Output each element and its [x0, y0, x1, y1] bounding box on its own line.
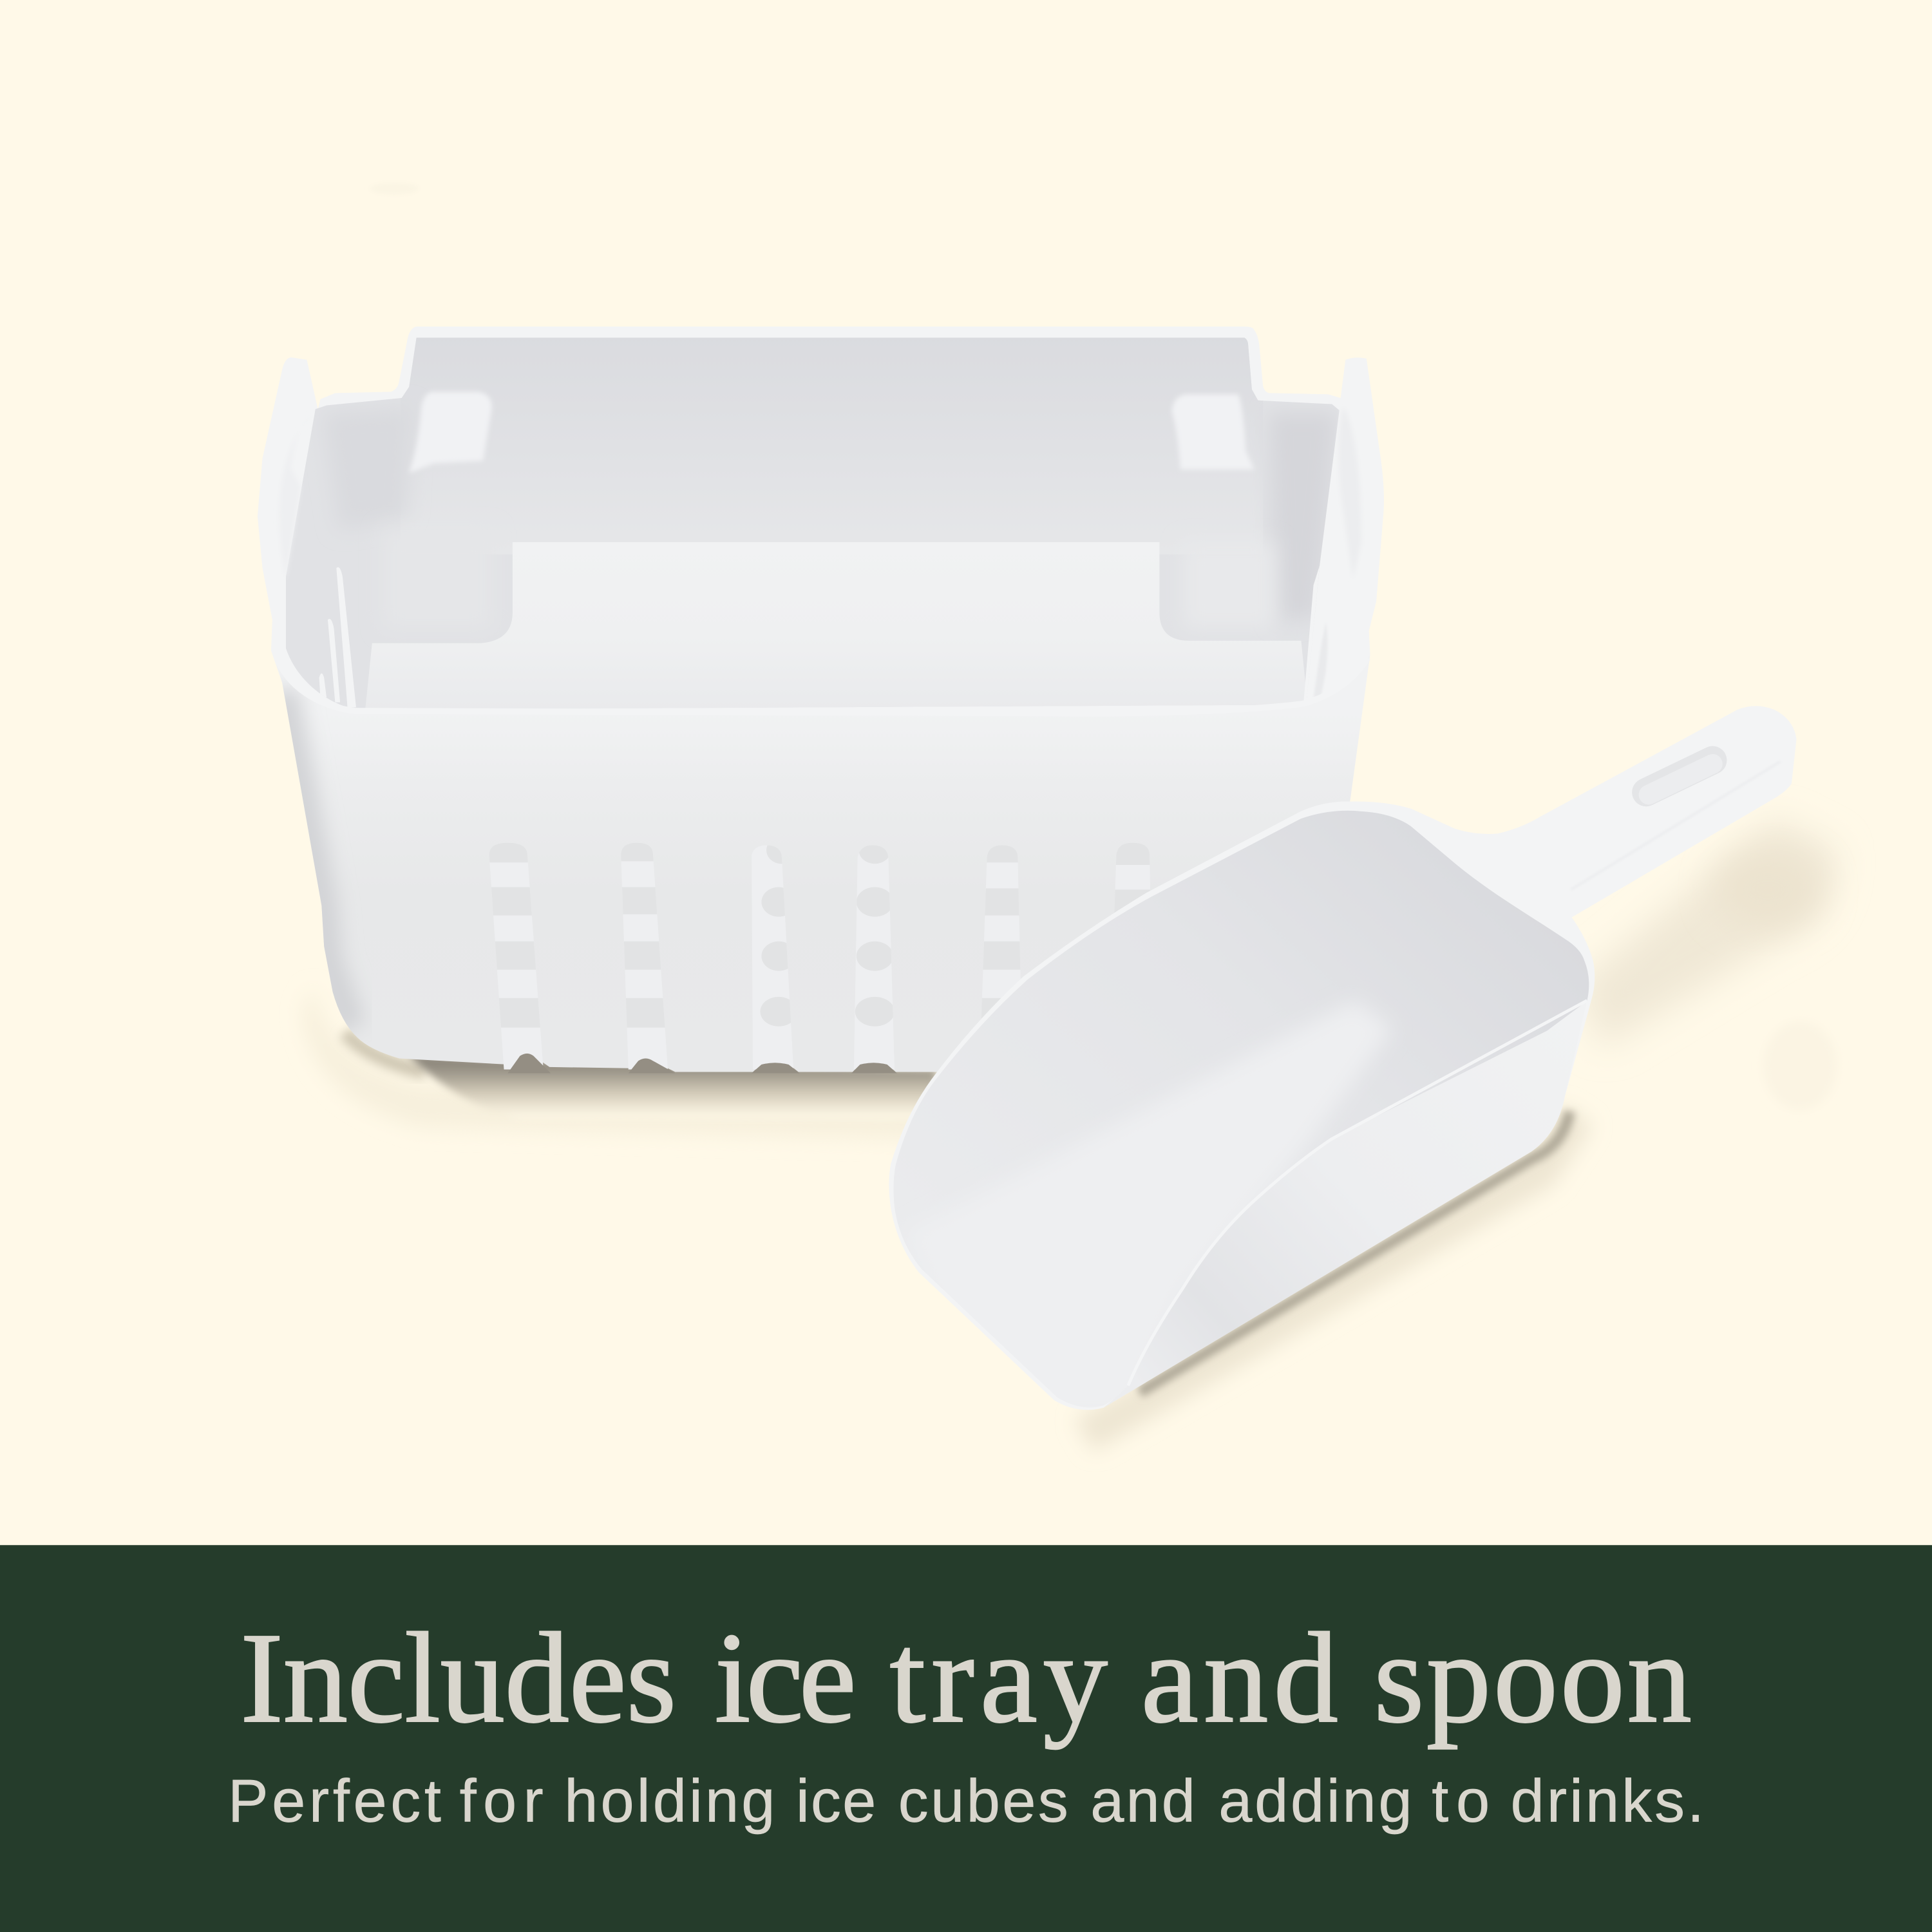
faint smudges on background [370, 182, 1837, 1110]
band background [0, 1545, 1932, 1932]
heading: Includes [240, 1607, 676, 1750]
stepped floor [365, 542, 1309, 715]
left pillar body light [382, 530, 493, 629]
drain slot 6 [1104, 838, 1159, 1072]
caption band [0, 1545, 1932, 1932]
drain slot 1 [504, 1056, 544, 1070]
right pillar body light [1251, 558, 1272, 611]
subheading: ice [796, 1767, 876, 1835]
spoon outer side wall [1104, 1001, 1587, 1408]
front wall left shading [282, 690, 351, 1029]
drain slot 4 [850, 837, 900, 1072]
subheading: and [1090, 1767, 1195, 1835]
tray silhouette with handles [258, 327, 1384, 1035]
base wall tone [286, 398, 1340, 708]
left pillar cap [409, 392, 492, 473]
shadow: spoon [1084, 819, 1836, 1435]
drain slot 2 [629, 1061, 668, 1070]
spoon floor highlight band [905, 1001, 1392, 1417]
spoon handle rib [1571, 761, 1781, 889]
spoon handle hole [1646, 760, 1712, 795]
subheading: adding [1218, 1767, 1412, 1835]
rim highlight [276, 656, 1368, 714]
tray interior [277, 333, 1361, 715]
spoon bowl interior [887, 801, 1602, 1417]
subheading: drinks. [1511, 1767, 1704, 1835]
drain slot 5 [973, 838, 1029, 1072]
side wall shading left [323, 406, 413, 530]
shadow: tray [302, 986, 936, 1140]
right side slits [1303, 565, 1320, 703]
spoon side wall rim edge [1128, 1001, 1587, 1385]
subheading: cubes [898, 1767, 1068, 1835]
subheading: holding [564, 1767, 775, 1835]
subheading: for [460, 1767, 544, 1835]
left side slits [319, 567, 356, 707]
ice tray [258, 327, 1384, 1073]
left handle opening [279, 414, 313, 579]
subheading: Perfect [228, 1767, 441, 1835]
front wall [272, 650, 1370, 1072]
spoon silhouette [889, 706, 1797, 1410]
right slit detail [1314, 622, 1328, 697]
bottom edge notches [507, 1054, 897, 1073]
right pillar cap [1172, 394, 1255, 469]
right handle opening [1339, 406, 1361, 579]
heading: ice [715, 1607, 857, 1750]
drain slot 3 [746, 837, 801, 1072]
side wall shading right [1274, 417, 1331, 614]
heading: and [1141, 1607, 1338, 1750]
subheading: to [1432, 1767, 1490, 1835]
heading: spoon [1374, 1607, 1692, 1750]
back wall [415, 340, 1248, 349]
spoon [887, 706, 1797, 1417]
heading: tray [889, 1607, 1108, 1750]
